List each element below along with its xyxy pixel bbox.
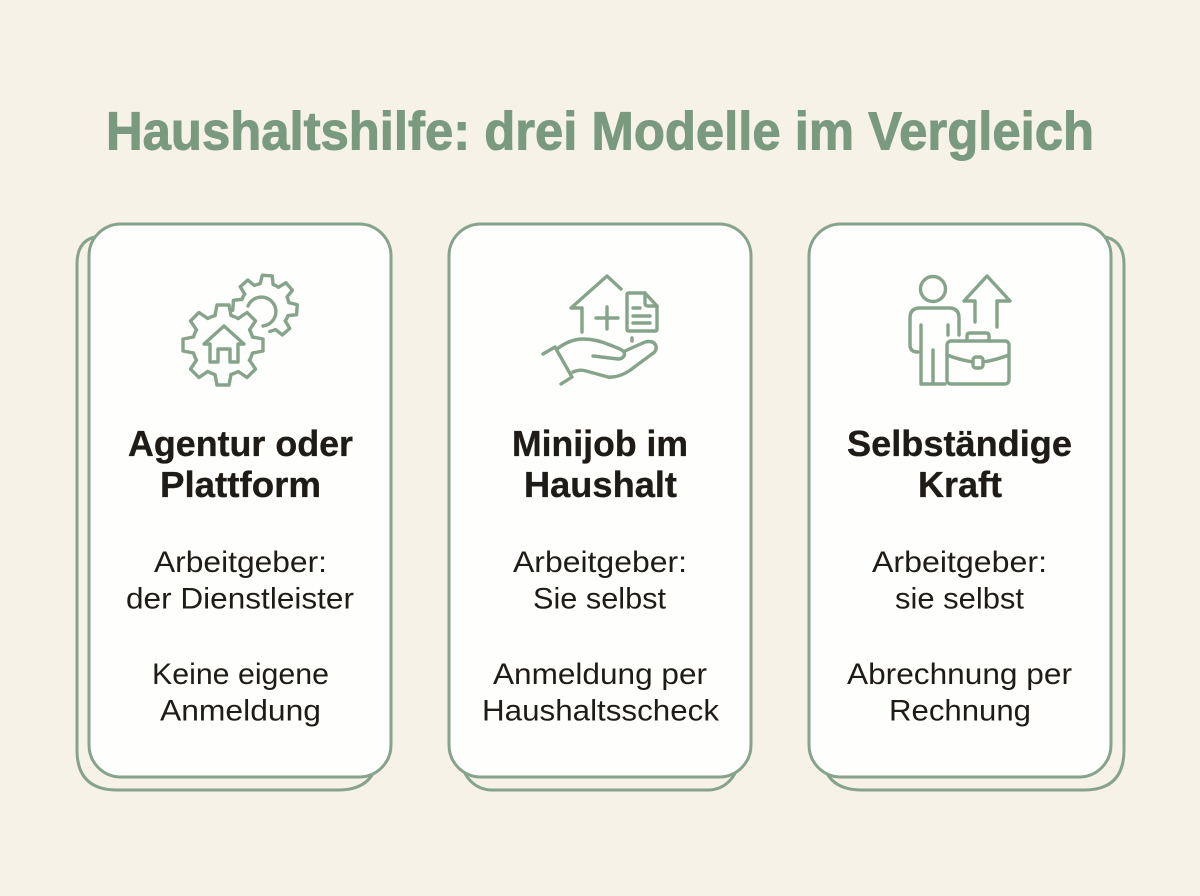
heading card 1: Agentur oder (128, 423, 353, 464)
front card 3 (809, 224, 1111, 777)
heading card 2: Haushalt (524, 464, 677, 505)
back card 2 (462, 300, 738, 790)
back card 1 (77, 236, 378, 790)
panel: Minijob im Haushalt (449, 224, 751, 790)
panel: Selbständige Kraft (809, 224, 1124, 790)
front card 2 (449, 224, 751, 777)
text: registration card 2: Haushaltsscheck (482, 694, 720, 728)
text: registration card 1: Anmeldung (160, 694, 321, 728)
heading card 1: Plattform (160, 464, 321, 505)
text: employer card 3: sie selbst (895, 582, 1025, 616)
title: Haushaltshilfe: drei Modelle im Vergleich (106, 102, 1094, 162)
heading card 1 (128, 423, 353, 505)
heading card 2 (512, 423, 688, 505)
text: employer card 2: Sie selbst (533, 582, 667, 616)
text: registration card 2: Anmeldung per (493, 658, 707, 691)
text: employer card 2 (513, 546, 687, 616)
icon: gears with house (183, 273, 299, 385)
text: employer card 3 (872, 546, 1047, 616)
text: employer card 1 (126, 546, 354, 616)
text: billing card 3: Rechnung (889, 694, 1031, 728)
heading card 2: Minijob im (512, 423, 688, 464)
text: employer card 1: Arbeitgeber: (154, 546, 327, 579)
text: registration card 2 (482, 658, 720, 728)
text: registration card 1: Keine eigene (152, 658, 329, 691)
back card 3 (822, 236, 1124, 790)
heading card 3 (847, 423, 1072, 505)
text: registration card 1 (152, 658, 329, 728)
text: employer card 3: Arbeitgeber: (872, 546, 1047, 579)
text: billing card 3 (847, 658, 1072, 728)
text: employer card 1: der Dienstleister (126, 582, 354, 616)
text: employer card 2: Arbeitgeber: (513, 546, 687, 579)
front card 1 (89, 224, 391, 777)
heading card 3: Selbständige (847, 423, 1072, 464)
icon: person, arrow and briefcase (910, 276, 1010, 384)
panel: Agentur oder Plattform (77, 224, 391, 790)
heading card 3: Kraft (918, 464, 1002, 505)
text: billing card 3: Abrechnung per (847, 658, 1072, 691)
icon: hand holding house and document (543, 276, 657, 384)
